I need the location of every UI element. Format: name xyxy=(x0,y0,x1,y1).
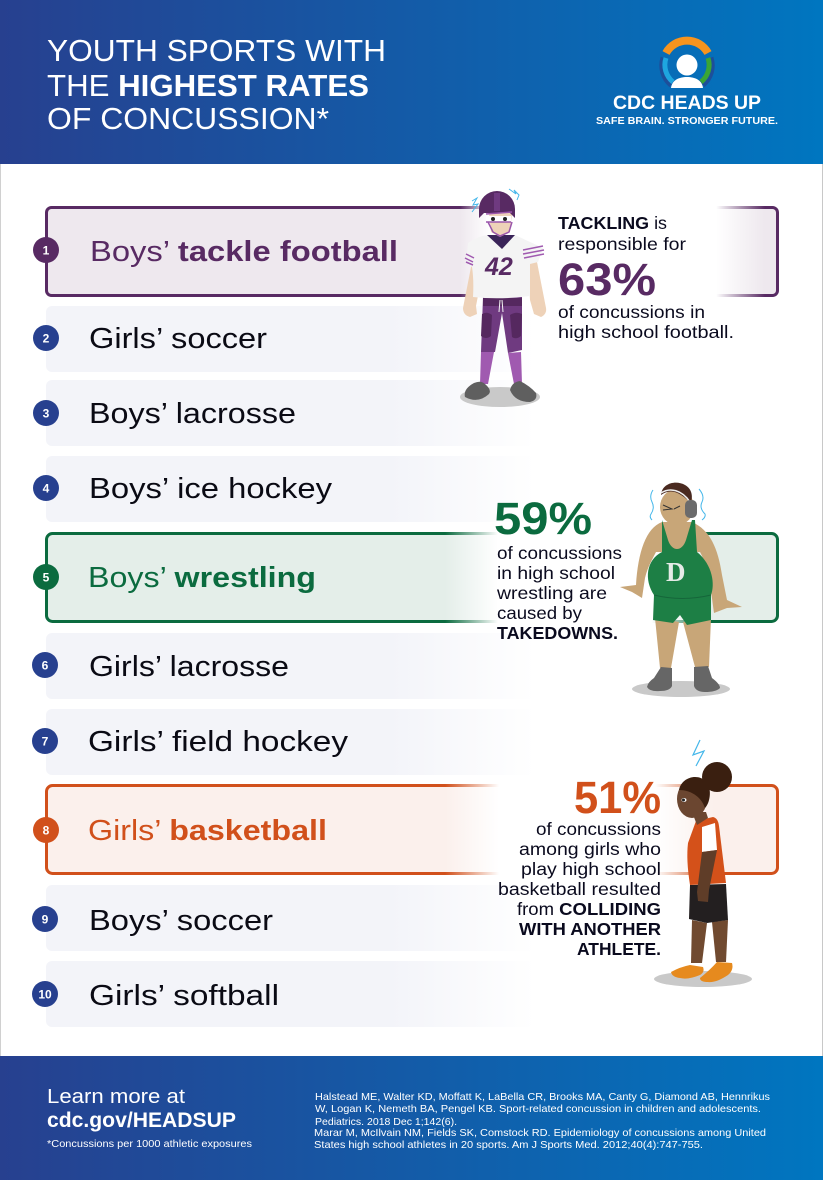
header band xyxy=(0,0,823,164)
title: THE HIGHEST RATES xyxy=(47,68,369,103)
rank 10: girls' softball xyxy=(32,980,279,1012)
footer: references: Pediatrics. 2018 Dec 1;142(6). xyxy=(315,1117,457,1128)
callout: colliding 51%: among girls who xyxy=(519,839,661,859)
rank 7: girls' field hockey: Girls’ field hockey xyxy=(88,726,349,758)
callout: tackling 63%: 63% xyxy=(558,254,656,305)
rank 8: girls' basketball: 8 xyxy=(43,824,50,838)
callout: tackling 63%: TACKLING is xyxy=(558,213,667,233)
footer: references: W, Logan K, Nemeth BA, Pengel KB. Sport-related concussion in children and adolescents. xyxy=(315,1104,761,1115)
callout: colliding 51%: from COLLIDING xyxy=(517,899,661,919)
callout: tackling 63%: high school football. xyxy=(558,322,734,342)
illustration: football player: 42 xyxy=(484,253,513,281)
rank 3: boys' lacrosse: Boys’ lacrosse xyxy=(89,398,296,430)
callout: takedowns 59%: in high school xyxy=(497,563,615,583)
rank 4: boys' ice hockey: Boys’ ice hockey xyxy=(89,473,333,505)
rank 5: boys' wrestling: Boys’ wrestling xyxy=(88,562,316,594)
rank 2: girls' soccer: 2 xyxy=(43,332,50,346)
rank 9: boys' soccer: Boys’ soccer xyxy=(89,905,273,937)
footer band xyxy=(0,1056,823,1180)
callout: tackling 63%: responsible for xyxy=(558,234,686,254)
callout: takedowns 59% xyxy=(494,493,622,643)
rank 6: girls' lacrosse: Girls’ lacrosse xyxy=(89,651,289,683)
footer: references: Marar M, McIlvain NM, Fields SK, Comstock RD. Epidemiology of concussions among United xyxy=(314,1128,766,1139)
callout: colliding 51%: play high school xyxy=(521,859,661,879)
illustration: basketball player xyxy=(654,740,752,987)
rank 4: boys' ice hockey: 4 xyxy=(43,482,50,496)
callout: takedowns 59%: TAKEDOWNS. xyxy=(497,623,618,643)
rank 2: girls' soccer: Girls’ soccer xyxy=(89,323,267,355)
illustration: wrestler: D xyxy=(666,557,686,587)
rank 8: girls' basketball: Girls’ basketball xyxy=(88,815,327,847)
rank 5: boys' wrestling: 5 xyxy=(43,570,50,584)
ranked list rows xyxy=(46,306,536,1027)
footer: learn more: cdc.gov/HEADSUP xyxy=(47,1109,236,1132)
footer: references: States high school athletes in 20 sports. Am J Sports Med. 2012;40(4):747-755. xyxy=(314,1140,703,1151)
callout: takedowns 59%: 59% xyxy=(494,493,592,544)
callout: takedowns 59%: wrestling are xyxy=(496,583,607,603)
footer: learn more: *Concussions per 1000 athletic exposures xyxy=(47,1138,252,1150)
callout: colliding 51%: of concussions xyxy=(536,819,661,839)
callout: colliding 51%: ATHLETE. xyxy=(577,939,661,959)
footer: references xyxy=(314,1092,770,1151)
panel: girls' basketball highlight box xyxy=(46,782,778,876)
footer: learn more xyxy=(47,1086,252,1150)
panel: boys' tackle football highlight box xyxy=(46,204,778,299)
callout: colliding 51%: basketball resulted xyxy=(498,879,661,899)
illustration: football player xyxy=(460,189,546,407)
logo: CDC Heads Up xyxy=(596,41,778,127)
callout: tackling 63%: of concussions in xyxy=(558,302,705,322)
footer: learn more: Learn more at xyxy=(47,1086,185,1108)
rank 1: boys' tackle football: 1 xyxy=(43,244,50,258)
footer: references: Halstead ME, Walter KD, Moffatt K, LaBella CR, Brooks MA, Canty G, Diamond AB, Hennrikus xyxy=(315,1092,770,1103)
rank 10: girls' softball: 10 xyxy=(38,988,52,1002)
rank 3: boys' lacrosse: 3 xyxy=(43,406,50,420)
title: YOUTH SPORTS WITH xyxy=(47,33,386,68)
panel: boys' wrestling highlight box xyxy=(46,530,778,624)
rank 10: girls' softball: Girls’ softball xyxy=(89,980,279,1012)
rank 1: boys' tackle football: Boys’ tackle football xyxy=(90,236,398,268)
rank 6: girls' lacrosse: 6 xyxy=(42,658,49,672)
title xyxy=(47,33,386,136)
rank 7: girls' field hockey: 7 xyxy=(42,734,49,748)
callout: tackling 63% xyxy=(558,213,734,342)
callout: takedowns 59%: of concussions xyxy=(497,543,622,563)
logo: CDC Heads Up: SAFE BRAIN. STRONGER FUTURE. xyxy=(596,115,778,127)
callout: colliding 51%: 51% xyxy=(574,772,661,823)
rank 2: girls' soccer xyxy=(33,323,267,355)
callout: colliding 51% xyxy=(498,772,661,959)
illustration: wrestler xyxy=(620,483,742,697)
rank 9: boys' soccer: 9 xyxy=(42,912,49,926)
callout: takedowns 59%: caused by xyxy=(497,603,582,623)
logo: CDC Heads Up: CDC HEADS UP xyxy=(613,92,761,114)
callout: colliding 51%: WITH ANOTHER xyxy=(519,919,661,939)
rank 9: boys' soccer xyxy=(32,905,273,937)
title: OF CONCUSSION* xyxy=(47,101,329,136)
